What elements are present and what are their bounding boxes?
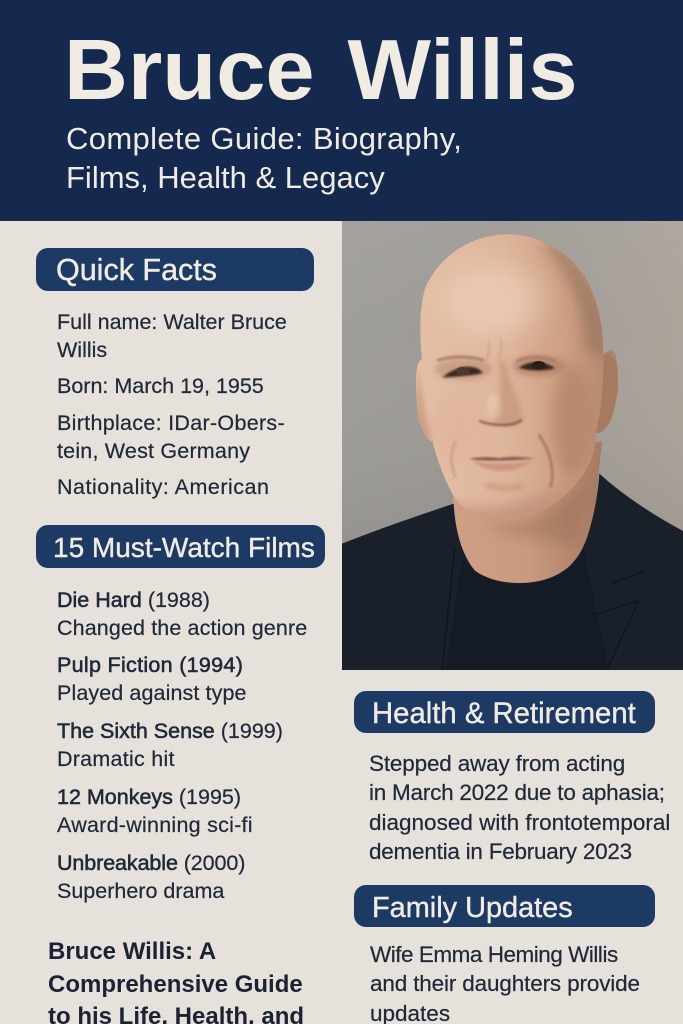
portrait photo xyxy=(342,221,683,670)
film list: 12 Monkeys (1995) xyxy=(57,785,241,809)
film list: Played against type xyxy=(57,681,247,705)
health text: diagnosed with frontotemporal xyxy=(369,810,670,835)
film list: Dramatic hit xyxy=(57,747,175,771)
studio backdrop xyxy=(342,221,683,670)
fact list xyxy=(57,310,287,499)
health text xyxy=(369,751,670,864)
heading: health xyxy=(354,691,655,733)
mouth xyxy=(469,457,535,460)
eye sockets xyxy=(435,359,492,380)
health text: Stepped away from acting xyxy=(369,751,625,776)
crown shading xyxy=(542,241,609,361)
fact list: Willis xyxy=(57,338,107,362)
shirt collar shade xyxy=(445,549,609,670)
film list: Pulp Fiction (1994) xyxy=(57,653,243,677)
nose shading xyxy=(489,361,522,425)
lapels xyxy=(442,549,644,670)
health text: in March 2022 due to aphasia; xyxy=(369,780,665,805)
panel: quick facts xyxy=(36,248,314,499)
family text: and their daughters provide xyxy=(370,971,640,996)
right cheek shade xyxy=(552,364,592,478)
heading: films xyxy=(36,525,325,568)
film list: Die Hard (1988) xyxy=(57,588,210,612)
left cheek tone xyxy=(432,398,479,458)
comprehensive guide heading: Bruce Willis: A xyxy=(48,938,216,965)
smile fold xyxy=(539,434,552,488)
comprehensive guide heading xyxy=(48,938,304,1024)
film list: Changed the action genre xyxy=(57,616,307,640)
neck shadow xyxy=(482,481,589,548)
fact list: Born: March 19, 1955 xyxy=(57,374,264,398)
forehead highlight xyxy=(442,264,542,338)
title: Bruce Willis xyxy=(64,23,578,118)
heading: films: 15 Must-Watch Films xyxy=(53,532,315,563)
panel: health and retirement xyxy=(354,691,670,864)
fact list: tein, West Germany xyxy=(57,439,250,463)
comprehensive guide heading: Comprehensive Guide xyxy=(48,970,303,998)
family text: Wife Emma Heming Willis xyxy=(370,942,618,967)
film list: Unbreakable (2000) xyxy=(57,851,245,875)
film list: The Sixth Sense (1999) xyxy=(57,719,283,743)
right ear xyxy=(596,354,618,433)
panel: must-watch films xyxy=(36,525,325,903)
subtitle xyxy=(66,121,462,195)
jacket xyxy=(342,474,683,670)
heading: quick facts: Quick Facts xyxy=(56,253,217,287)
eyes xyxy=(442,367,483,378)
heading: family xyxy=(354,885,655,927)
subtitle: Complete Guide: Biography, xyxy=(66,121,462,156)
jaw shade xyxy=(458,486,570,519)
heading: quick facts xyxy=(36,248,314,291)
neck xyxy=(452,441,602,594)
health text: dementia in February 2023 xyxy=(369,839,632,864)
family text xyxy=(370,942,640,1024)
fact list: Birthplace: IDar-Obers- xyxy=(57,411,285,435)
brows xyxy=(437,357,555,361)
film list: Superhero drama xyxy=(57,879,224,903)
header banner xyxy=(0,0,683,221)
fact list: Full name: Walter Bruce xyxy=(57,310,287,334)
left ear shade xyxy=(416,372,433,441)
subtitle: Films, Health & Legacy xyxy=(66,160,385,195)
heading: health: Health & Retirement xyxy=(372,697,636,730)
head xyxy=(416,234,618,518)
fact list: Nationality: American xyxy=(57,475,269,499)
film list: Award-winning sci-fi xyxy=(57,813,253,837)
panel: family updates xyxy=(354,885,655,1024)
film list xyxy=(56,588,307,903)
heading: family: Family Updates xyxy=(372,892,573,924)
forehead furrow xyxy=(486,338,502,361)
